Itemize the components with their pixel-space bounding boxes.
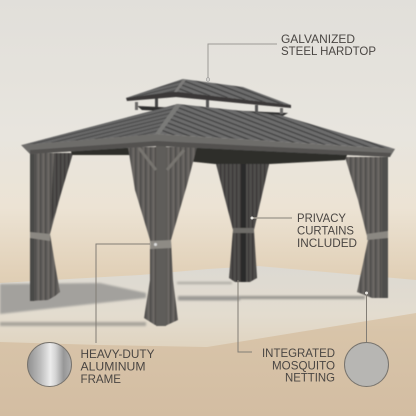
patio floor <box>0 266 416 347</box>
post: back right <box>345 157 388 298</box>
callout: heavy-duty aluminum frame: FRAME <box>80 372 121 386</box>
lower roof <box>21 104 395 157</box>
callout: galvanized steel hardtop: GALVANIZED <box>281 32 355 46</box>
callout: integrated mosquito netting: MOSQUITO <box>272 358 335 372</box>
gazebo <box>21 79 395 326</box>
callout: heavy-duty aluminum frame: ALUMINUM <box>80 360 146 374</box>
roof fascia <box>21 134 395 157</box>
post: front centre <box>128 145 197 326</box>
callout: integrated mosquito netting <box>238 280 388 386</box>
callout: privacy curtains included: INCLUDED <box>297 236 357 250</box>
callout: privacy curtains included: PRIVACY <box>297 211 346 225</box>
callout: privacy curtains included <box>250 211 357 250</box>
upper roof <box>126 79 291 117</box>
callout: privacy curtains included: CURTAINS <box>297 224 354 238</box>
post: back left <box>30 153 73 301</box>
callout: heavy-duty aluminum frame: HEAVY-DUTY <box>80 347 154 361</box>
ceiling beam <box>70 148 350 164</box>
callout: galvanized steel hardtop: STEEL HARDTOP <box>281 44 376 58</box>
callout: galvanized steel hardtop <box>206 32 376 81</box>
post: back centre <box>215 158 270 282</box>
callout: integrated mosquito netting: NETTING <box>285 370 335 384</box>
callout: heavy-duty aluminum frame <box>28 244 154 386</box>
floor shadows <box>0 282 365 326</box>
callout: integrated mosquito netting: INTEGRATED <box>262 346 335 360</box>
